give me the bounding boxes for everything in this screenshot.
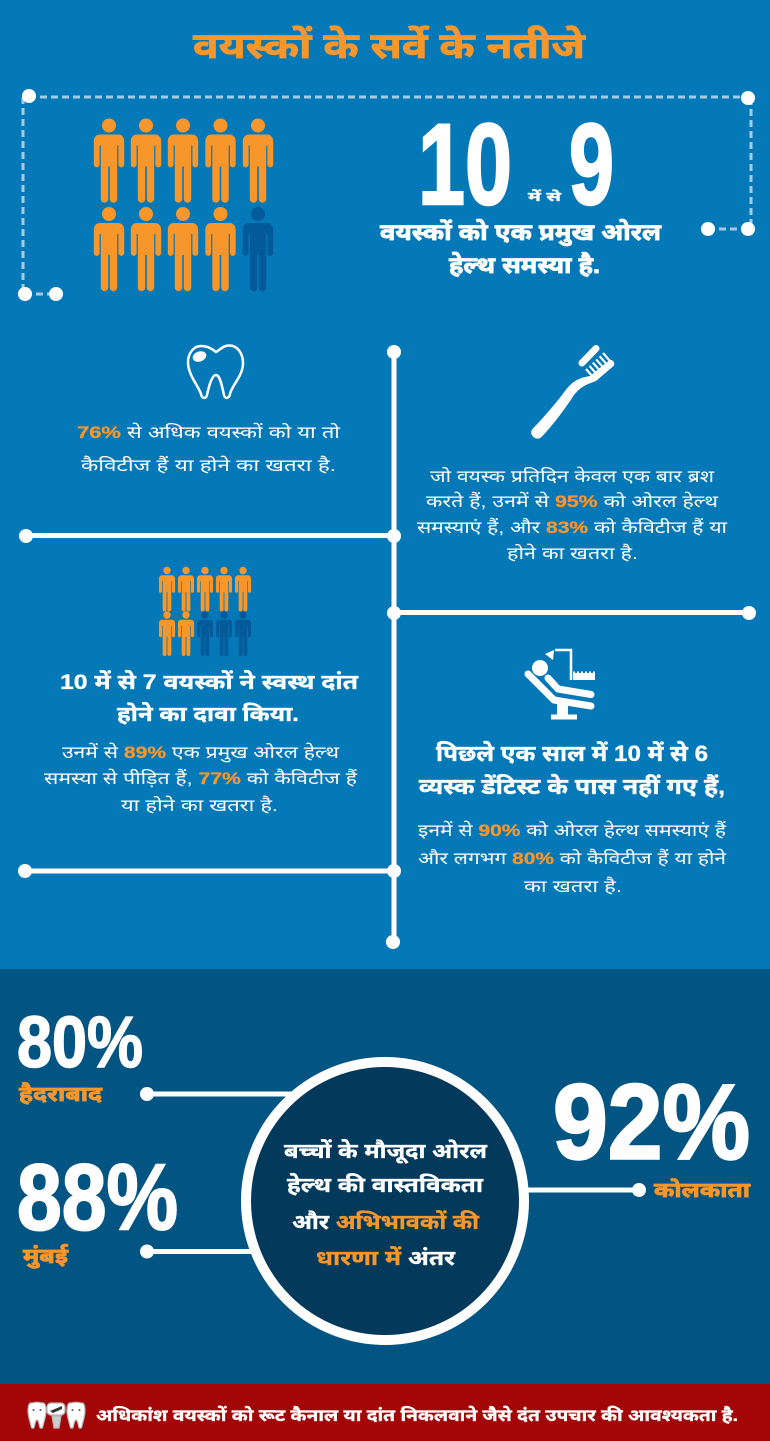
icon: ten people, nine highlighted: [94, 118, 273, 291]
central circle with text: हेल्थ की वास्तविकता: [287, 1173, 484, 1197]
text: brushing once a day: समस्याएं हैं, और 83% को कैविटीज हैं या: [417, 516, 728, 537]
text: brushing once a day: होने का खतरा है.: [507, 542, 638, 563]
icon: dental chair: [528, 650, 595, 717]
statistic: Kolkata 92%: 92%: [553, 1062, 750, 1182]
bottom banner: [0, 1384, 770, 1441]
icon: three teeth: [28, 1402, 85, 1428]
statistic: 10 में से 9: [418, 101, 614, 229]
heading: 10 में से 7: होने का दावा किया.: [117, 702, 299, 726]
text: 90% and 80%: और लगभग 80% को कैविटीज हैं या होने: [418, 847, 727, 868]
icon: ten small people, seven highlighted: [159, 567, 251, 656]
connector lines: [140, 1087, 646, 1258]
text: 90% and 80%: इनमें से 90% को ओरल हेल्थ समस्याएं हैं: [418, 819, 727, 840]
heading: 10 में से 7: [60, 670, 359, 726]
text: brushing once a day: [417, 465, 728, 563]
text: 76% cavities: 76% से अधिक वयस्कों को या तो: [77, 421, 341, 442]
background: [0, 0, 770, 969]
title: वयस्कों के सर्वे के नतीजे: [193, 24, 586, 66]
heading: last year dentist: [418, 741, 725, 799]
icon: tooth with cavity: [188, 345, 243, 398]
statistic: 10 में से 9: में से: [528, 189, 562, 204]
heading: last year dentist: व्यस्क डेंटिस्ट के पास नहीं गए हैं,: [418, 774, 725, 799]
heading: oral health problem: [380, 219, 662, 278]
text: 89% and 77%: समस्या से पीड़ित हैं, 77% को कैविटीज हैं: [44, 767, 358, 788]
statistic: Hyderabad 80%: 80%: [17, 1003, 143, 1083]
timeline lines: [18, 345, 756, 949]
text: brushing once a day: जो वयस्क प्रतिदिन केवल एक बार ब्रश: [430, 465, 715, 486]
heading: oral health problem: हेल्थ समस्या है.: [449, 252, 600, 278]
statistic: Mumbai 88%: 88%: [17, 1144, 178, 1250]
statistic: Kolkata 92%: कोलकाता: [654, 1178, 751, 1202]
text: 90% and 80%: [418, 819, 727, 896]
text: brushing once a day: करते हैं, उनमें से 95% को ओरल हेल्थ: [426, 490, 719, 511]
central circle with text: [246, 1062, 524, 1340]
statistic: Hyderabad 80%: [17, 1003, 143, 1106]
central circle with text: बच्चों के मौजूदा ओरल: [284, 1139, 488, 1164]
icon: toothbrush: [531, 348, 614, 439]
text: 90% and 80%: का खतरा है.: [524, 875, 622, 896]
dashed frame with dots: [18, 89, 755, 301]
text: 89% and 77%: [44, 741, 358, 815]
lower panel background: [0, 969, 770, 1384]
statistic: Mumbai 88%: मुंबई: [23, 1244, 69, 1269]
heading: last year dentist: पिछले एक साल में 10 में से 6: [436, 741, 708, 766]
text: 89% and 77%: उनमें से 89% एक प्रमुख ओरल हेल्थ: [62, 741, 340, 764]
bottom banner: अधिकांश वयस्कों को रूट कैनाल या दांत निकलवाने जैसे दंत उपचार की आवश्यकता है.: [96, 1404, 738, 1425]
text: 89% and 77%: या होने का खतरा है.: [121, 794, 278, 815]
text: 76% cavities: कैविटीज हैं या होने का खतरा है.: [81, 454, 336, 475]
text: 76% cavities: [77, 421, 341, 475]
central circle with text: धारणा में अंतर: [316, 1246, 456, 1270]
heading: oral health problem: वयस्कों को एक प्रमुख ओरल: [380, 219, 662, 246]
heading: 10 में से 7: 10 में से 7 वयस्कों ने स्वस्थ दांत: [60, 670, 359, 694]
statistic: 10 में से 9: 10: [418, 101, 512, 229]
statistic: Hyderabad 80%: हैदराबाद: [19, 1082, 103, 1106]
central circle with text: और अभिभावकों की: [292, 1210, 480, 1234]
statistic: 10 में से 9: 9: [569, 101, 614, 229]
